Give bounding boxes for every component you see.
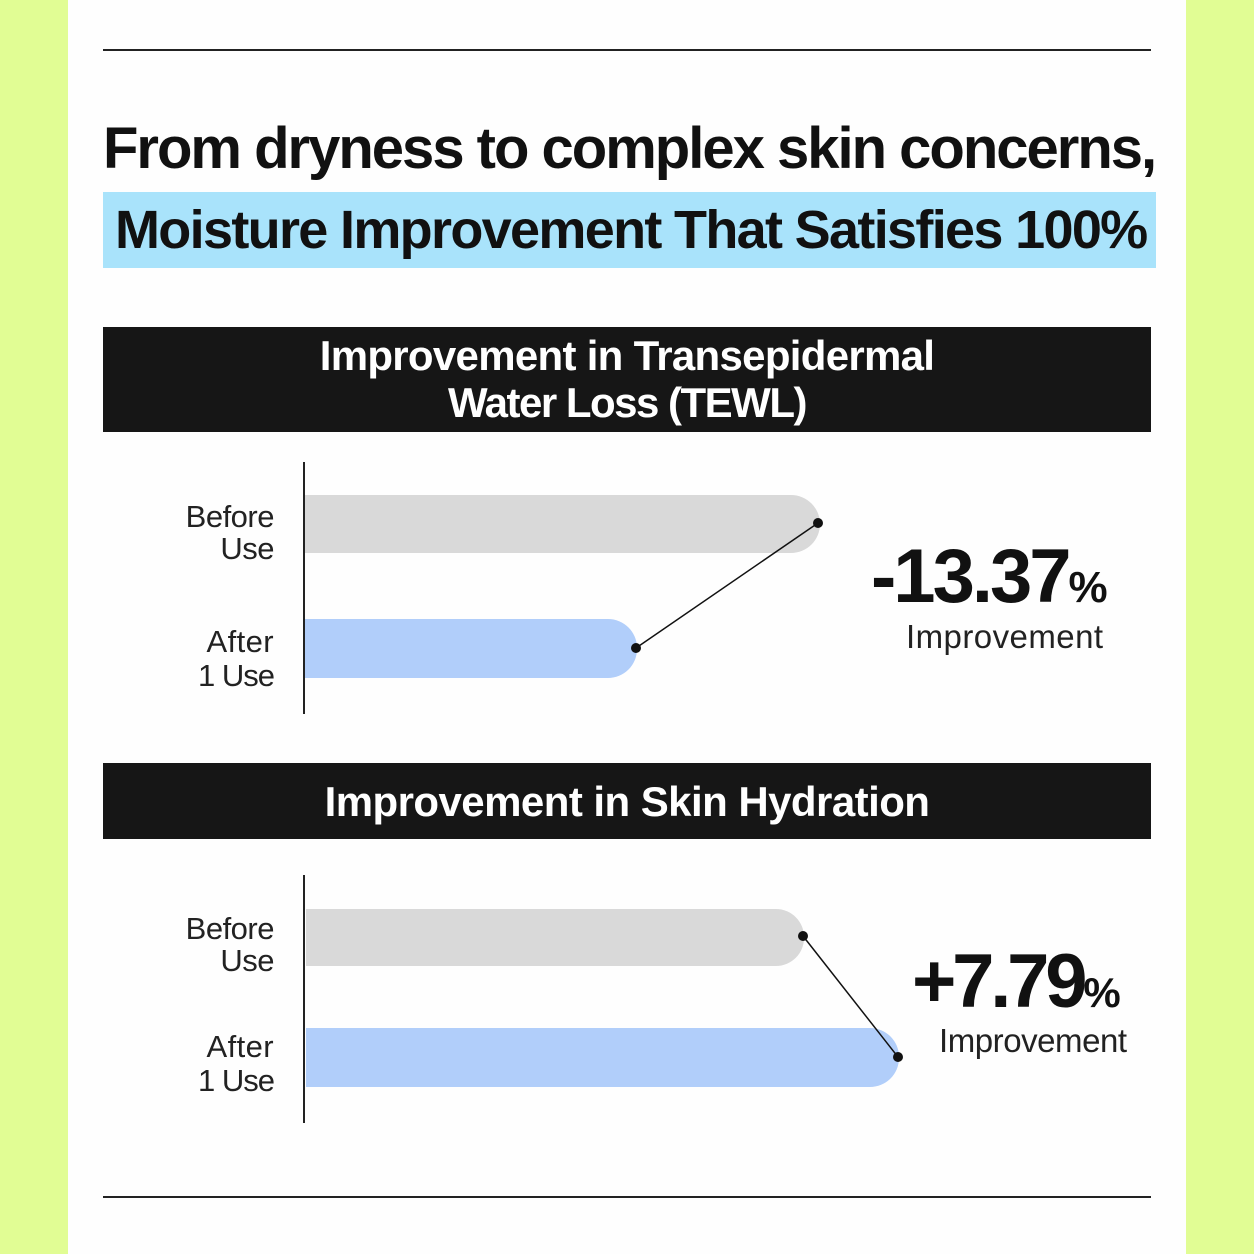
stat: +7.79%: +7.79% (912, 939, 1121, 1024)
label: after 1 use: After (207, 1029, 274, 1064)
stat caption: Improvement (906, 618, 1104, 655)
label: before use (186, 911, 274, 978)
chart: TEWL (303, 462, 823, 714)
subtitle highlight (103, 192, 1156, 268)
label: after 1 use: 1 Use (198, 1063, 274, 1098)
label: before use: Use (220, 943, 274, 978)
label: before use: Use (220, 531, 274, 566)
label: after 1 use: After (207, 624, 274, 659)
bars and connector (303, 462, 823, 714)
panel heading: hydration (103, 763, 1151, 839)
bars and connector (303, 875, 903, 1123)
title: From dryness to complex skin concerns, (103, 116, 1155, 181)
panel heading: TEWL (103, 327, 1151, 432)
panel heading: TEWL: Water Loss (TEWL) (448, 379, 806, 426)
label: before use (186, 499, 274, 566)
label: before use: Before (186, 911, 274, 946)
label: after 1 use (198, 1029, 274, 1098)
label: before use: Before (186, 499, 274, 534)
panel heading: TEWL: Improvement in Transepidermal (320, 332, 934, 379)
label: after 1 use (198, 624, 274, 693)
stat caption: Improvement (939, 1022, 1127, 1059)
panel heading: hydration: Improvement in Skin Hydration (325, 778, 929, 825)
stat: -13.37%: -13.37% (871, 534, 1108, 619)
label: after 1 use: 1 Use (198, 658, 274, 693)
subtitle text: Moisture Improvement That Satisfies 100% (115, 200, 1147, 260)
chart: hydration (303, 875, 903, 1123)
